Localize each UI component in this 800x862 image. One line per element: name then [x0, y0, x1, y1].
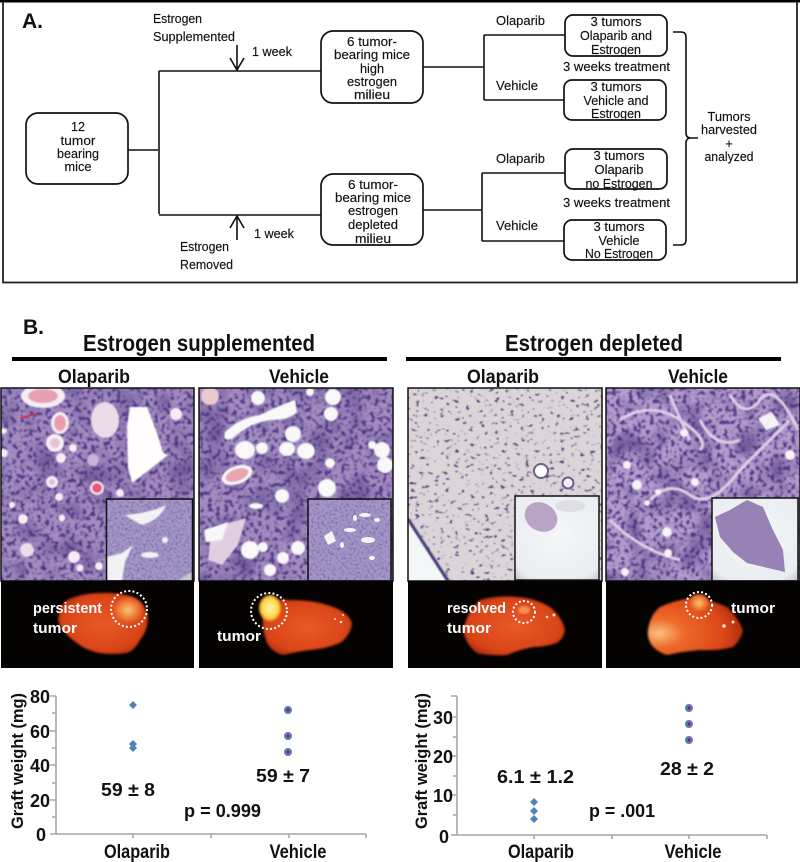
- label: tumors harvested and analyzed: analyzed: [704, 149, 754, 164]
- stat: vehicle mean: 59 ± 7: [256, 766, 310, 786]
- column headings: Olaparib: [58, 367, 130, 388]
- box: vehicle and estrogen: [564, 79, 666, 121]
- box: olaparib no estrogen: no Estrogen: [586, 176, 652, 191]
- inset: low-power view: [309, 500, 391, 581]
- chart: graft weight, estrogen depleted: [412, 693, 767, 862]
- arrow: estrogen supplemented: [230, 45, 244, 70]
- labels along flowchart branches: Estrogen: [180, 239, 229, 254]
- data points: olaparib: [129, 701, 137, 752]
- panel: estrogen supplemented, olaparib histology: [0, 384, 194, 581]
- box: high estrogen milieu: bearing mice: [334, 47, 410, 62]
- photo: vehicle tumor, estrogen depleted: [606, 581, 800, 668]
- panel: estrogen depleted, olaparib histology: [408, 388, 602, 581]
- data points: vehicle: [284, 706, 292, 756]
- labels along flowchart branches: 1 week: [254, 226, 294, 241]
- labels along flowchart branches: 1 week: [252, 44, 292, 59]
- box: 12 tumor bearing mice: tumor: [60, 133, 96, 148]
- box: olaparib and estrogen: Olaparib and: [580, 28, 652, 43]
- box: estrogen depleted milieu: bearing mice: [335, 190, 411, 205]
- column headings: Olaparib: [467, 367, 539, 388]
- box: vehicle no estrogen: No Estrogen: [585, 246, 653, 261]
- bracket: tumors harvested: [673, 32, 698, 245]
- stat: p value: p = .001: [589, 801, 655, 821]
- label: tumors harvested and analyzed: harvested: [701, 122, 757, 137]
- box: estrogen depleted milieu: [321, 174, 423, 246]
- photo: persistent tumor: [1, 581, 194, 668]
- box: vehicle and estrogen: 3 tumors: [590, 79, 642, 94]
- box: estrogen depleted milieu: milieu: [355, 231, 391, 246]
- box: vehicle and estrogen: Vehicle and: [584, 93, 648, 108]
- box: 12 tumor bearing mice: 12: [71, 119, 85, 134]
- y axis label: Graft weight (mg): [8, 693, 27, 829]
- y axis tick labels: [433, 708, 453, 847]
- heading: A.: A.: [22, 10, 43, 33]
- labels along flowchart branches: 3 weeks treatment: [563, 59, 670, 74]
- labels along flowchart branches: Removed: [180, 257, 233, 272]
- labels along flowchart branches: Vehicle: [496, 78, 538, 93]
- box: olaparib and estrogen: [565, 14, 667, 57]
- box: 12 tumor bearing mice: [26, 113, 128, 184]
- y axis tick labels: 20: [433, 747, 453, 767]
- y axis tick labels: 20: [30, 791, 50, 811]
- labels along flowchart branches: [153, 11, 670, 272]
- marker: tumor circle: [513, 601, 535, 623]
- labels along flowchart branches: Olaparib: [496, 151, 545, 166]
- box: olaparib no estrogen: 3 tumors: [594, 148, 645, 163]
- box: olaparib no estrogen: [565, 148, 667, 191]
- column headings: Vehicle: [668, 367, 728, 388]
- labels along flowchart branches: 3 weeks treatment: [563, 195, 670, 210]
- label: resolved tumor: resolved: [447, 600, 506, 617]
- labels along flowchart branches: Olaparib: [496, 13, 545, 28]
- box: high estrogen milieu: 6 tumor-: [347, 34, 397, 49]
- box: high estrogen milieu: [321, 31, 423, 103]
- box: 12 tumor bearing mice: bearing: [57, 146, 99, 161]
- marker: tumor circle: [111, 591, 147, 627]
- photo: vehicle tumor: [199, 581, 393, 668]
- label: persistent tumor: persistent: [33, 600, 102, 617]
- labels along flowchart branches: Estrogen: [153, 11, 202, 26]
- heading: B.: B.: [23, 316, 44, 339]
- label: resolved tumor: [447, 600, 506, 637]
- heading: Estrogen depleted: [406, 330, 781, 361]
- y axis tick labels: 40: [30, 756, 50, 776]
- y axis tick labels: 30: [433, 708, 453, 728]
- panel: estrogen supplemented, vehicle histology: [199, 387, 393, 581]
- stat: olaparib mean: 59 ± 8: [101, 780, 155, 800]
- chart: graft weight, estrogen supplemented: [8, 687, 366, 862]
- heading: Estrogen supplemented: [12, 330, 387, 361]
- connector lines of the flowchart: [128, 35, 565, 241]
- y axis label: Graft weight (mg): [412, 693, 431, 829]
- box: 12 tumor bearing mice: mice: [64, 159, 92, 174]
- panel A: study design flowchart: [0, 0, 800, 282]
- photo: resolved tumor: [408, 581, 602, 668]
- box: estrogen depleted milieu: estrogen: [348, 203, 398, 218]
- column headings: Vehicle: [269, 367, 329, 388]
- box: vehicle no estrogen: [564, 219, 666, 261]
- label: persistent tumor: [33, 600, 102, 637]
- box: high estrogen milieu: estrogen: [347, 74, 397, 89]
- heading: Estrogen depleted: Estrogen depleted: [505, 330, 683, 356]
- label: tumor: tumor: [731, 600, 775, 617]
- data points: vehicle: [685, 704, 693, 744]
- marker: tumor circle: [686, 592, 712, 618]
- data points: olaparib: [530, 798, 538, 823]
- y axis tick labels: 0: [439, 827, 449, 847]
- heading: Estrogen supplemented: Estrogen supplemented: [83, 330, 315, 356]
- y axis tick labels: 60: [30, 722, 50, 742]
- label: tumors harvested and analyzed: +: [725, 136, 733, 151]
- y axis tick labels: 0: [36, 825, 46, 845]
- arrow: estrogen removed: [230, 216, 244, 240]
- box: high estrogen milieu: high: [360, 61, 384, 76]
- marker: tumor circle: [251, 593, 287, 629]
- labels along flowchart branches: Supplemented: [153, 29, 235, 44]
- stat: p value: p = 0.999: [184, 801, 261, 821]
- inset: low-power view: [712, 498, 798, 581]
- box: estrogen depleted milieu: depleted: [348, 217, 398, 232]
- box: vehicle and estrogen: Estrogen: [591, 106, 641, 121]
- label: tumors harvested and analyzed: Tumors: [708, 109, 751, 124]
- box: olaparib no estrogen: Olaparib: [594, 162, 644, 177]
- x axis labels: [104, 842, 326, 862]
- label: tumor: tumor: [217, 628, 261, 645]
- stat: olaparib mean: 6.1 ± 1.2: [497, 767, 574, 787]
- y axis tick labels: [30, 687, 50, 845]
- stat: vehicle mean: 28 ± 2: [660, 759, 714, 779]
- box: vehicle no estrogen: Vehicle: [598, 233, 640, 248]
- box: vehicle no estrogen: 3 tumors: [594, 219, 645, 234]
- column headings: [58, 367, 728, 388]
- label: resolved tumor: tumor: [447, 620, 491, 637]
- panel: estrogen depleted, vehicle histology: [606, 388, 800, 581]
- label: persistent tumor: tumor: [33, 620, 77, 637]
- box: olaparib and estrogen: 3 tumors: [590, 14, 642, 29]
- x axis labels: [508, 842, 722, 862]
- label: tumors harvested and analyzed: [701, 109, 757, 164]
- box: high estrogen milieu: milieu: [354, 87, 390, 102]
- inset: low-power view: [107, 500, 192, 581]
- y axis tick labels: 80: [30, 687, 50, 707]
- inset: low-power view: [515, 496, 599, 580]
- box: estrogen depleted milieu: 6 tumor-: [348, 177, 398, 192]
- labels along flowchart branches: Vehicle: [496, 218, 538, 233]
- box: olaparib and estrogen: Estrogen: [591, 42, 641, 57]
- y axis tick labels: 10: [433, 786, 453, 806]
